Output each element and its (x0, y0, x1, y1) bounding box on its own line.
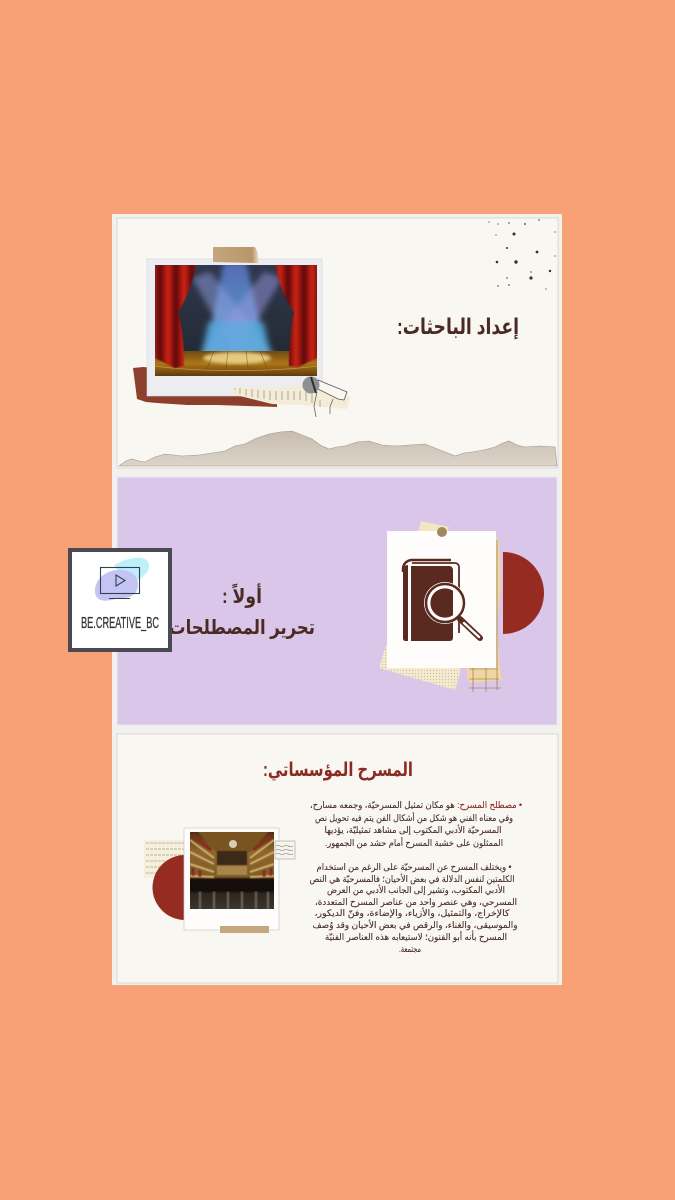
paragraph: theatre vs play: الأدبي المكتوب، وتشير إلى الجانب الأدبي من العرض (327, 884, 505, 896)
heading: إعداد الباحثات: (397, 314, 519, 340)
section label: أولاً : (222, 582, 262, 608)
adhesive tape (220, 926, 269, 933)
section label (169, 582, 315, 639)
hall photo (190, 832, 274, 909)
small note (275, 841, 295, 859)
paragraph: definition: • مصطلح المسرح: هو مكان تمثيل المسرحيّة، وجمعه مسارح، (310, 800, 522, 810)
torn paper strip (133, 367, 277, 407)
paragraph: theatre vs play: • ويختلف المسرح عن المسرحيّة على الرغم من استخدام (316, 862, 512, 873)
paragraph: definition (310, 800, 522, 848)
panel: definition slide (117, 734, 558, 983)
paragraph: definition: الممثلون على خشبة المسرح أمام حشد من الجمهور. (325, 837, 503, 848)
polaroid frame (147, 259, 322, 396)
pin (437, 527, 447, 537)
brand name: BE.CREATIVE_BC (81, 615, 159, 632)
heading: المسرح المؤسساتي: (263, 760, 413, 781)
red circle (152, 855, 185, 920)
red half circle (503, 552, 544, 634)
paragraph: theatre vs play (310, 862, 518, 954)
section label: تحرير المصطلحات (169, 617, 315, 639)
note card (387, 531, 496, 668)
paragraph: theatre vs play: والموسيقى، والغناء، والرقص في بعض الأحيان وقد وُصف (312, 919, 518, 930)
microphone sketch (231, 376, 350, 417)
stage photo (155, 262, 317, 376)
logo badge (70, 550, 170, 650)
icon: book and magnifier (403, 560, 480, 641)
paragraph: definition: المسرحيّة الأدبي المكتوب إلى مشاهد تمثيليّة، يؤديها (324, 824, 502, 836)
polaroid frame (184, 828, 279, 930)
adhesive tape (213, 247, 259, 263)
paragraph: theatre vs play: المسرح بأنه أبو الفنون؛ لاستيعابه هذه العناصر الفنيّة (325, 930, 507, 942)
icon: blue blobs (95, 558, 149, 601)
handwriting paper (144, 840, 186, 878)
dotted paper (379, 645, 461, 690)
ink speckles (488, 219, 556, 290)
icon: play screen (100, 568, 140, 598)
panel: title slide (117, 218, 558, 468)
torn paper hills (119, 431, 557, 466)
paragraph: definition: وفي معناه الفني هو شكل من أشكال الفن يتم فيه تحويل نص (315, 812, 513, 824)
grid paper strip (466, 535, 502, 682)
cream paper top (418, 521, 449, 537)
paragraph: theatre vs play: مجتمعة. (399, 944, 421, 954)
paragraph: theatre vs play: الكلمتين لنفس الدلالة في بعض الأحيان؛ فالمسرحيّة هي النص (310, 873, 514, 884)
paragraph: theatre vs play: كالإخراج، والتمثيل، والأزياء، والإضاءة، وفنّ الديكور، (314, 907, 510, 919)
slides frame (112, 214, 562, 985)
paragraph: theatre vs play: المسرحي، وهي عنصر واحد من عناصر المسرح المتعددة، (315, 897, 517, 907)
panel: section slide (117, 477, 557, 725)
